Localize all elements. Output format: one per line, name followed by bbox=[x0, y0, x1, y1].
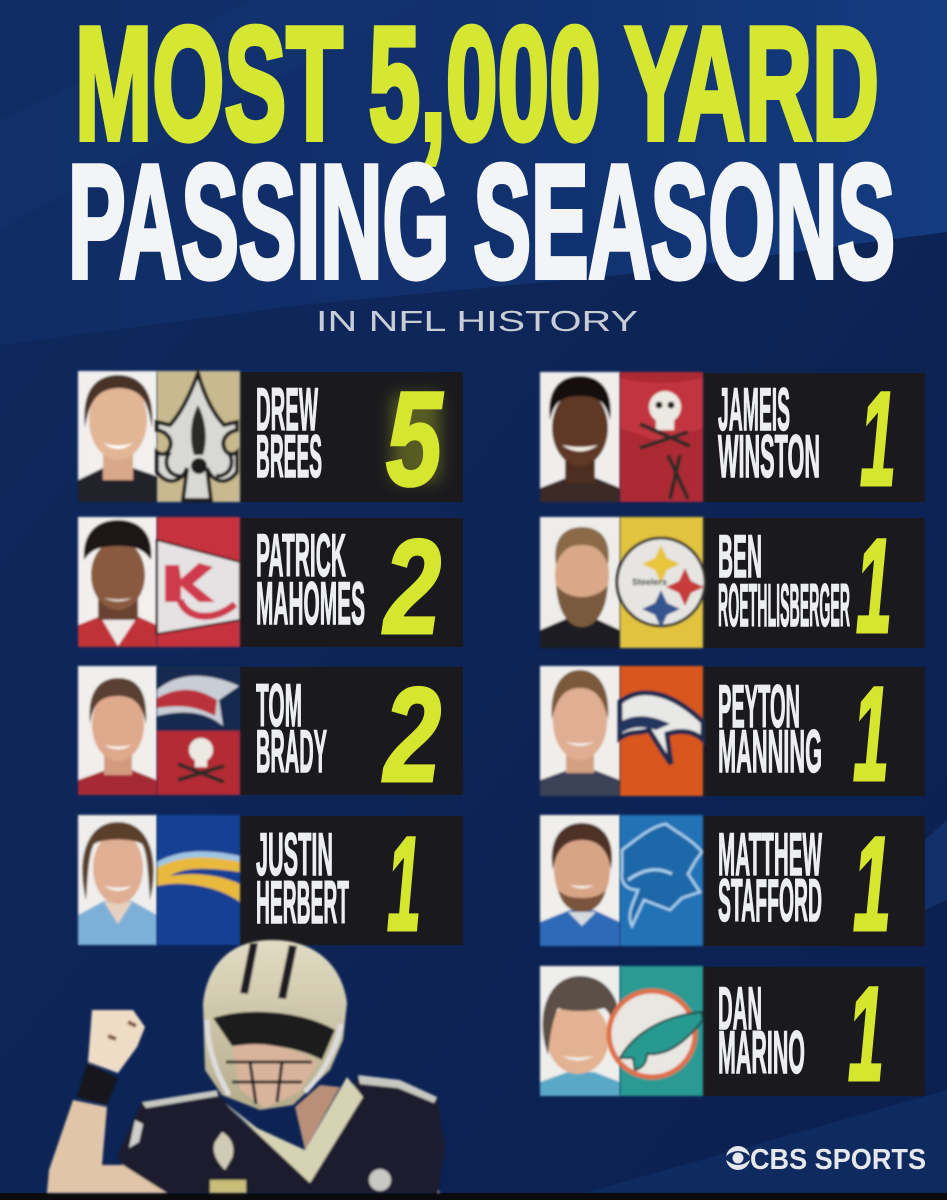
logo: Saints bbox=[157, 371, 240, 502]
panel: Jameis Winston: 1 bbox=[860, 365, 896, 514]
photo: Matthew Stafford bbox=[540, 815, 620, 946]
photo: Jameis Winston bbox=[540, 372, 620, 502]
name bbox=[718, 376, 820, 490]
panel: Patrick Mahomes: MAHOMES bbox=[256, 570, 365, 637]
panel: Dan Marino: 1 bbox=[848, 960, 884, 1109]
name bbox=[256, 522, 365, 637]
panel: Ben Roethlisberger: 1 bbox=[856, 512, 892, 661]
jersey bbox=[117, 1077, 445, 1193]
panel: Drew Brees: DREW bbox=[256, 376, 318, 443]
right arm bbox=[413, 1170, 440, 1193]
player: Drew Brees celebrating bbox=[47, 940, 445, 1193]
photo: Ben Roethlisberger bbox=[540, 517, 620, 648]
name bbox=[718, 673, 822, 785]
panel: Dan Marino bbox=[540, 960, 925, 1109]
panel: Justin Herbert: JUSTIN bbox=[256, 821, 333, 888]
panel: Justin Herbert: 1 bbox=[387, 810, 421, 959]
panel: Ben Roethlisberger bbox=[540, 512, 925, 661]
panel: Patrick Mahomes bbox=[78, 513, 463, 662]
panel: Justin Herbert: HERBERT bbox=[256, 869, 349, 936]
name bbox=[256, 672, 327, 785]
count: 5 bbox=[386, 365, 444, 514]
name bbox=[718, 523, 850, 639]
jersey badges bbox=[214, 1132, 233, 1170]
helmet bbox=[203, 940, 347, 1110]
name: BEN bbox=[718, 523, 762, 590]
photo: Drew Brees bbox=[78, 371, 157, 502]
photo: Justin Herbert bbox=[78, 815, 157, 945]
arm bbox=[47, 1100, 167, 1193]
logo: CBS Sports: CBS SPORTS bbox=[750, 1144, 926, 1176]
panel: Tom Brady: BRADY bbox=[256, 718, 327, 785]
name bbox=[718, 821, 822, 934]
count: 1 bbox=[853, 810, 891, 959]
panel: Jameis Winston: JAMEIS bbox=[718, 376, 790, 443]
name bbox=[718, 975, 805, 1086]
subtitle: IN NFL HISTORY bbox=[316, 306, 638, 338]
panel: Matthew Stafford bbox=[540, 810, 925, 959]
panel: Peyton Manning bbox=[540, 660, 925, 809]
count: 2 bbox=[382, 513, 441, 662]
logo: Chargers bbox=[157, 815, 240, 945]
title bbox=[68, 0, 895, 312]
fist bbox=[88, 1010, 145, 1073]
panel: Justin Herbert bbox=[78, 810, 463, 959]
panel: Drew Brees: BREES bbox=[256, 423, 322, 490]
collar bbox=[225, 1077, 363, 1183]
name bbox=[256, 821, 349, 936]
logo: Steelers: Steelers bbox=[632, 577, 667, 587]
logo: Dolphins bbox=[609, 966, 703, 1096]
photo: Dan Marino bbox=[540, 966, 620, 1096]
logo: Patriots and Buccaneers bbox=[157, 666, 240, 795]
panel: Tom Brady bbox=[78, 661, 463, 810]
panel: Peyton Manning: 1 bbox=[853, 660, 889, 809]
wristband bbox=[77, 1063, 118, 1105]
panel: Patrick Mahomes: PATRICK bbox=[256, 522, 346, 589]
logo: Buccaneers bbox=[620, 372, 703, 502]
name: TOM bbox=[256, 672, 302, 739]
icon: CBS eye bbox=[724, 1146, 752, 1170]
panel: Jameis Winston bbox=[540, 365, 925, 514]
name: DAN bbox=[718, 975, 762, 1042]
panel: Drew Brees bbox=[78, 365, 463, 514]
photo: Tom Brady bbox=[78, 666, 157, 795]
logo: Chiefs bbox=[157, 517, 240, 647]
photo: Peyton Manning bbox=[540, 666, 620, 796]
count: 2 bbox=[382, 661, 441, 810]
logo: Lions bbox=[620, 815, 703, 946]
logo: Broncos bbox=[620, 666, 703, 796]
name bbox=[256, 376, 322, 490]
photo: Patrick Mahomes bbox=[78, 517, 157, 647]
count glow bbox=[392, 395, 440, 481]
logo: Steelers bbox=[617, 517, 705, 648]
